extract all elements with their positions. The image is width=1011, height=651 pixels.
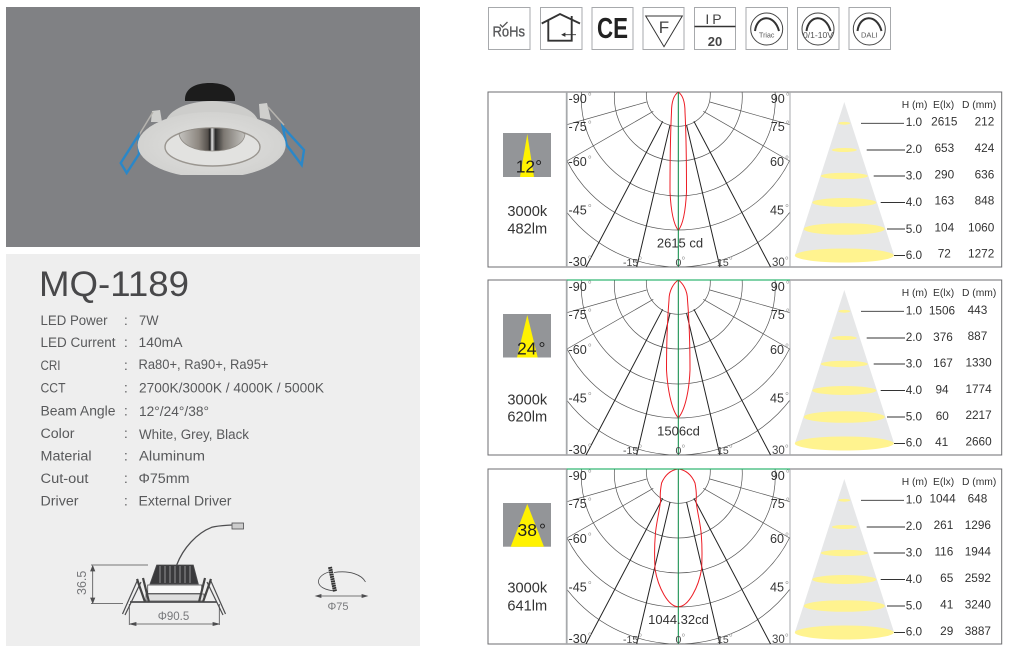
polar labels: 30 [772,445,785,457]
polar labels: ° [588,120,592,131]
cone table: 2217 [965,408,992,422]
polar labels: ° [729,256,733,267]
icon: 0/1-10V dimming: 0/1-10V [803,30,833,40]
cone table: D (mm) [962,288,996,299]
cone table: D (mm) [962,100,996,111]
cone table: 41 [940,598,953,612]
polar grid [537,0,819,267]
cone table [902,100,996,262]
cone table: 60 [936,409,949,423]
polar labels: ° [638,633,642,644]
cone table: D (mm) [962,477,996,488]
polar labels: 75 [771,497,785,511]
cone table: 104 [934,220,955,234]
cone table: 2615 [931,114,958,128]
spec table: Beam Angle [40,404,116,418]
cone table: 1.0 [906,492,923,506]
diagram: side dimension drawing [91,523,244,626]
cone table: 1.0 [906,115,923,129]
peak intensity: 1506cd [657,424,700,439]
cone table: 290 [934,167,955,181]
polar labels: ° [786,469,790,480]
spec table: 7W [139,313,159,328]
cone table: 2.0 [906,519,923,533]
cone table: 3240 [965,598,991,612]
cone table: 1506 [929,303,956,317]
cone table: 1774 [965,382,992,396]
label: cut-out 75: Φ75 [327,601,349,613]
icon: IP20: IP [705,11,725,27]
polar grid [537,170,819,455]
spec table: Φ75mm [138,471,190,486]
polar labels: ° [786,120,790,131]
spec table: 140mA [138,335,182,350]
cone table: 261 [934,518,953,532]
cone table: 376 [933,330,953,344]
polar labels: ° [785,204,789,215]
peak intensity: 2615 cd [657,236,703,251]
polar labels: ° [786,92,790,103]
cone table: 6.0 [906,436,923,450]
polar labels: -60 [568,532,587,546]
label: colour temperature and lumen: 620lm [507,410,547,426]
polar labels: 0 [676,257,681,269]
icon: CE mark: CE [597,13,628,45]
polar labels: -45 [568,204,587,218]
icon: 0/1-10V dimming [798,8,839,50]
cone table: 1944 [965,545,991,559]
spec table: Aluminum [139,448,205,464]
label: height 36.5: 36.5 [75,571,89,595]
cone table: 1296 [965,518,991,532]
polar distribution curve [670,92,686,230]
polar labels: ° [638,444,642,455]
polar labels: ° [785,256,789,267]
peak intensity: 1044.32cd [648,612,709,627]
diagram: cut-out [316,567,367,598]
icon: Triac dimming: Triac [759,32,775,40]
spec table: LED Power [40,313,108,328]
polar labels: -75 [568,497,587,511]
cone table: 5.0 [906,598,923,612]
polar labels: ° [729,633,733,644]
label: colour temperature and lumen: 482lm [507,222,547,238]
label: diameter 90.5: Φ90.5 [158,611,189,623]
polar labels: -30 [568,255,587,269]
spec table: : [124,313,128,328]
cone table: 2660 [965,435,992,449]
polar labels: ° [786,308,790,319]
cone table: 636 [975,167,995,181]
spec table: White, Grey, Black [139,427,249,442]
cone table: 1044 [929,492,956,506]
cone table: 2.0 [906,142,923,156]
icon: DALI dimming [849,8,890,50]
icon: F triangle: F [659,18,669,37]
spec table: External Driver [138,494,232,508]
icon: DALI dimming: DALI [861,30,878,40]
cone table: E(lx) [933,288,954,299]
icons row [488,8,890,50]
polar labels: -90 [568,469,587,483]
spec table: 12°/24°/38° [139,404,209,419]
label: colour temperature and lumen: 641lm [507,598,547,614]
polar distribution curve [666,280,690,418]
icon: indoor house [540,8,582,50]
polar labels: -90 [568,92,587,106]
polar labels [568,469,790,646]
polar labels: 30 [772,257,785,269]
cone table: 648 [968,492,988,506]
spec table: : [124,358,128,373]
cone table: 443 [968,303,988,317]
cone table: 1.0 [906,303,923,317]
polar labels: ° [588,308,592,319]
cone table: 65 [940,571,954,585]
spec table: : [124,404,128,418]
icon: RoHS [488,8,530,50]
title: model number: MQ-1189 [39,265,189,304]
polar labels: 30 [772,634,785,646]
polar labels: -60 [568,155,587,169]
cone table [902,477,996,638]
illuminance cone [795,290,905,450]
spec table: : [124,335,128,350]
cone table: 5.0 [906,222,923,236]
polar labels: ° [785,444,789,455]
icon: IP20 [694,8,736,50]
cone table: 167 [933,356,953,370]
polar labels: ° [785,581,789,592]
spec table: : [124,448,128,464]
polar labels [568,92,790,269]
cone table: 163 [934,194,955,208]
polar labels: 15 [717,257,729,269]
polar labels: 75 [771,120,785,134]
cone table: 3887 [965,624,991,638]
polar labels: ° [729,444,733,455]
icon: CE mark [592,8,633,50]
spec table: CRI [40,358,60,373]
cone table: H (m) [902,477,927,488]
polar labels: ° [588,155,592,166]
cone table: 2592 [965,571,991,585]
polar labels: ° [785,155,789,166]
photo: recessed downlight [121,83,304,178]
spec table: CCT [40,380,66,396]
panel: 38 degree beam [488,359,1002,646]
polar labels: 90 [771,280,785,294]
polar labels: ° [588,632,592,643]
panel: specification [6,254,420,646]
panel: 24 degree beam [488,170,1002,457]
cone table: 6.0 [906,624,923,638]
cone table: 212 [975,114,994,128]
cone table: 1060 [968,220,995,234]
icon: F triangle [643,8,684,50]
cone table: 29 [940,624,953,638]
beam icon 24: 24° [517,338,545,358]
label: colour temperature and lumen: 3000k [507,204,547,220]
polar labels [568,280,790,457]
polar labels: ° [588,443,592,454]
cone table: 3.0 [906,356,923,370]
cone table: E(lx) [933,100,954,111]
polar labels: 90 [771,92,785,106]
spec table: LED Current [40,335,116,350]
cone table: 653 [934,141,955,155]
icon: Triac dimming [746,8,788,50]
polar labels: 45 [770,392,784,406]
polar labels: -15 [623,445,638,457]
polar labels: 60 [770,343,784,357]
beam icon 38: 38° [518,520,546,540]
polar labels: ° [681,444,685,455]
cone table: 887 [968,329,987,343]
beam icon 38 [503,503,551,547]
polar labels: -30 [568,632,587,646]
polar labels: 75 [771,308,785,322]
cone table [902,288,996,450]
cone table: 424 [975,141,995,155]
polar labels: ° [785,343,789,354]
spec table: 2700K/3000K / 4000K / 5000K [139,380,324,396]
cone table: 5.0 [906,410,923,424]
spec table: Ra80+, Ra90+, Ra95+ [138,357,269,372]
polar labels: -30 [568,443,587,457]
cone table: 848 [975,194,995,208]
polar labels: ° [588,343,592,354]
polar labels: 60 [770,532,784,546]
beam icon 12 [503,133,551,177]
polar labels: ° [786,497,790,508]
cone table: 1272 [968,246,994,260]
polar labels: -15 [623,257,638,269]
cone table: E(lx) [933,477,954,488]
polar labels: 45 [770,581,784,595]
cone table: 4.0 [906,195,923,209]
polar labels: ° [785,532,789,543]
cone table: 1330 [965,356,992,370]
spec table: Cut-out [40,471,89,486]
icon: IP20: 20 [708,34,722,49]
cone table: 6.0 [906,248,923,262]
polar labels: 15 [717,445,729,457]
polar labels: ° [588,497,592,508]
spec table: Driver [40,494,79,508]
polar labels: ° [588,392,592,403]
cone table: 4.0 [906,572,923,586]
cone table: 94 [935,382,949,396]
spec table [40,313,324,508]
cone table: H (m) [902,288,927,299]
polar labels: ° [681,256,685,267]
polar labels: ° [588,581,592,592]
polar labels: ° [638,256,642,267]
cone table: 3.0 [906,546,923,560]
polar labels: ° [681,633,685,644]
spec table: : [124,494,128,508]
polar labels: -75 [568,120,587,134]
polar labels: -60 [568,343,587,357]
spec table: Color [40,426,75,441]
polar distribution curve [655,469,702,607]
spec table: : [124,380,128,396]
panel: 12 degree beam [488,0,1002,269]
polar labels: ° [588,469,592,480]
polar labels: 60 [770,155,784,169]
illuminance cone [795,102,905,262]
polar labels: -45 [568,392,587,406]
beam icon 24 [503,314,551,358]
spec table: : [124,471,128,486]
panel: product photo [6,7,420,247]
cone table: 4.0 [906,383,923,397]
polar labels: 90 [771,469,785,483]
polar labels: 0 [676,445,681,457]
label: colour temperature and lumen: 3000k [507,581,547,597]
polar labels: -45 [568,581,587,595]
polar labels: -75 [568,308,587,322]
polar labels: ° [786,280,790,291]
cone table: 41 [935,435,948,449]
polar labels: 0 [676,634,681,646]
cone table: H (m) [902,100,927,111]
cone table: 3.0 [906,168,923,182]
polar labels: ° [588,280,592,291]
beam icon 12: 12° [516,157,542,177]
polar labels: 45 [770,204,784,218]
polar labels: ° [588,532,592,543]
polar labels: ° [785,392,789,403]
polar labels: -90 [568,280,587,294]
illuminance cone [795,479,905,640]
cone table: 72 [938,246,951,260]
polar labels: ° [588,92,592,103]
icon: RoHS: RoHs [492,24,525,40]
polar labels: ° [588,204,592,215]
cone table: 116 [934,545,954,559]
polar labels: ° [785,633,789,644]
polar labels: 15 [717,634,729,646]
spec table: : [124,426,128,441]
polar grid [537,359,819,644]
cone table: 2.0 [906,330,923,344]
spec table: Material [40,448,92,464]
polar labels: -15 [623,634,638,646]
label: colour temperature and lumen: 3000k [507,392,547,408]
polar labels: ° [588,255,592,266]
